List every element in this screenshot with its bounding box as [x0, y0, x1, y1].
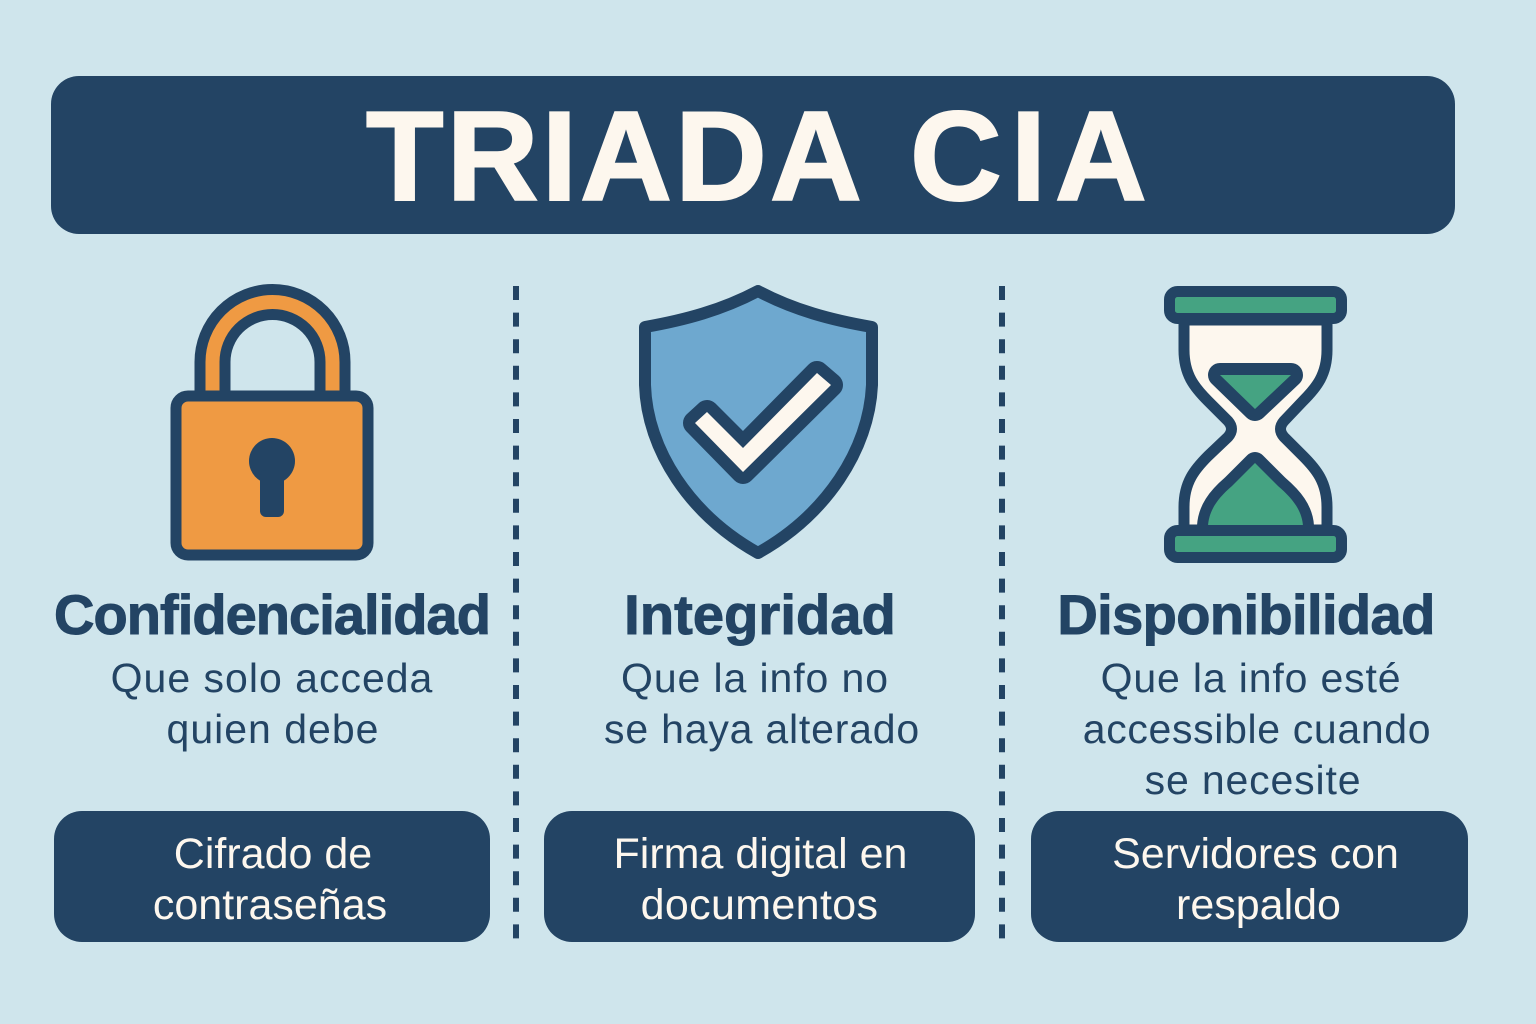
description: Integridad: se haya alterado — [604, 706, 920, 752]
heading: Disponibilidad: Disponibilidad — [1057, 583, 1435, 646]
description: Disponibilidad — [1083, 655, 1431, 803]
example: Disponibilidad: respaldo — [1176, 880, 1341, 928]
description: Disponibilidad: Que la info esté — [1101, 655, 1401, 701]
description: Disponibilidad: accessible cuando — [1083, 706, 1431, 752]
heading: Integridad: Integridad — [624, 583, 896, 646]
title text — [366, 85, 1156, 227]
example: Integridad — [544, 811, 975, 942]
description: Confidencialidad — [111, 655, 433, 752]
description: Integridad — [604, 655, 920, 752]
example: Confidencialidad: contraseñas — [153, 880, 387, 928]
title banner — [51, 76, 1455, 234]
description: Disponibilidad: se necesite — [1145, 757, 1361, 803]
title text: TRIADA — [366, 85, 865, 227]
description: Confidencialidad: quien debe — [167, 706, 379, 752]
description: Integridad: Que la info no — [621, 655, 889, 701]
example: Confidencialidad — [54, 811, 490, 942]
example: Integridad: Firma digital en — [614, 830, 907, 878]
example: Integridad: documentos — [641, 880, 878, 928]
example: Disponibilidad — [1031, 811, 1468, 942]
heading: Confidencialidad: Confidencialidad — [54, 583, 490, 646]
description: Confidencialidad: Que solo acceda — [111, 655, 433, 701]
title text: CIA — [910, 85, 1156, 227]
example: Confidencialidad: Cifrado de — [174, 830, 372, 878]
example: Disponibilidad: Servidores con — [1112, 830, 1399, 878]
